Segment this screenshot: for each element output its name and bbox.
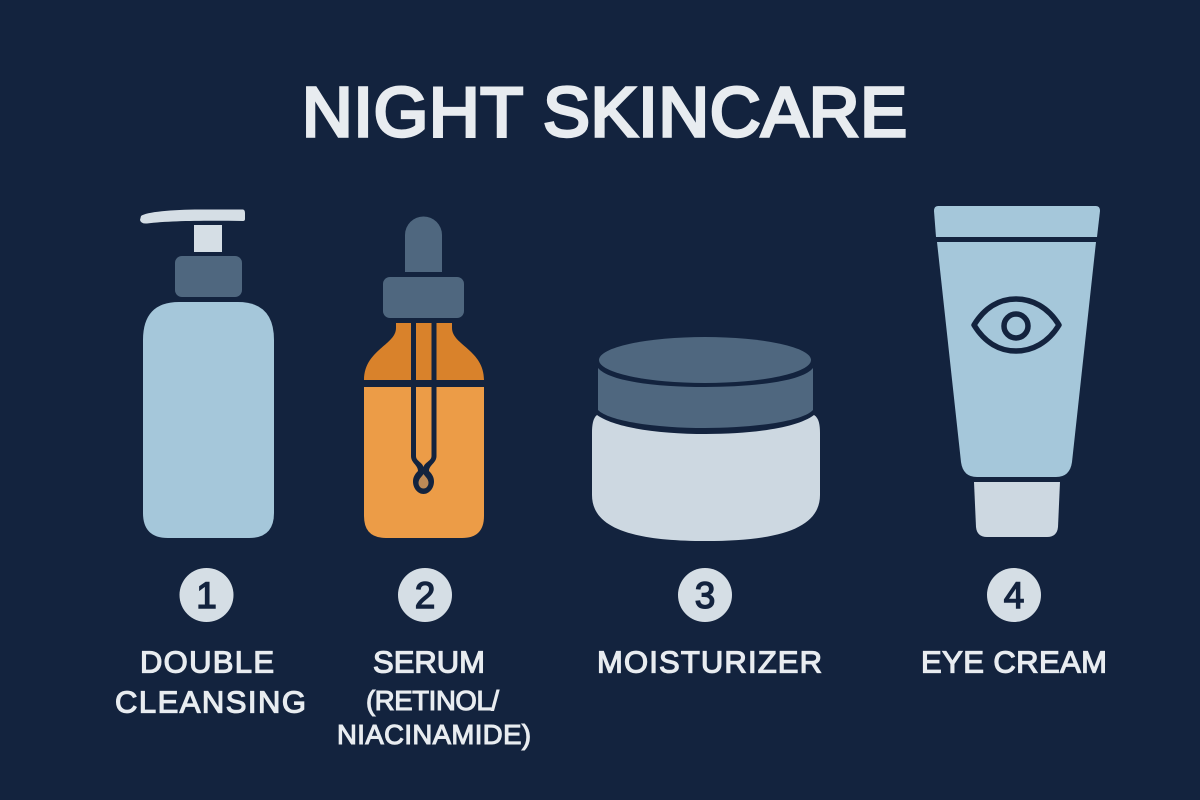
icon: eye (974, 299, 1059, 351)
label: eye cream: EYE CREAM (921, 644, 1107, 680)
step number 2: 2 (415, 575, 435, 616)
icon: pump bottle (140, 210, 274, 538)
panel: step 4 eye cream (921, 206, 1107, 680)
label: double cleansing: DOUBLE (140, 644, 274, 680)
icon: eye cream tube (934, 206, 1100, 537)
step number 1 (180, 568, 234, 622)
step number 4 (987, 568, 1041, 622)
title: NIGHT SKINCARE (302, 73, 907, 151)
step number 2 (398, 568, 452, 622)
step number 3: 3 (695, 575, 715, 616)
label: serum retinol niacinamide: SERUM (373, 644, 485, 680)
icon: dropper bottle (364, 217, 484, 538)
panel: step 2 serum (337, 217, 531, 750)
panel: step 1 double cleansing (115, 210, 306, 720)
label: serum retinol niacinamide: (RETINOL/ (366, 685, 499, 716)
step number 4: 4 (1004, 575, 1024, 616)
label: serum retinol niacinamide: NIACINAMIDE) (337, 719, 531, 750)
label: moisturizer: MOISTURIZER (597, 644, 822, 680)
label: double cleansing (115, 644, 306, 720)
step number 1: 1 (196, 575, 217, 616)
label: double cleansing: CLEANSING (115, 684, 306, 720)
icon: cream jar (592, 337, 820, 541)
label: serum retinol niacinamide (337, 644, 531, 750)
step number 3 (678, 568, 732, 622)
panel: step 3 moisturizer (592, 337, 822, 680)
